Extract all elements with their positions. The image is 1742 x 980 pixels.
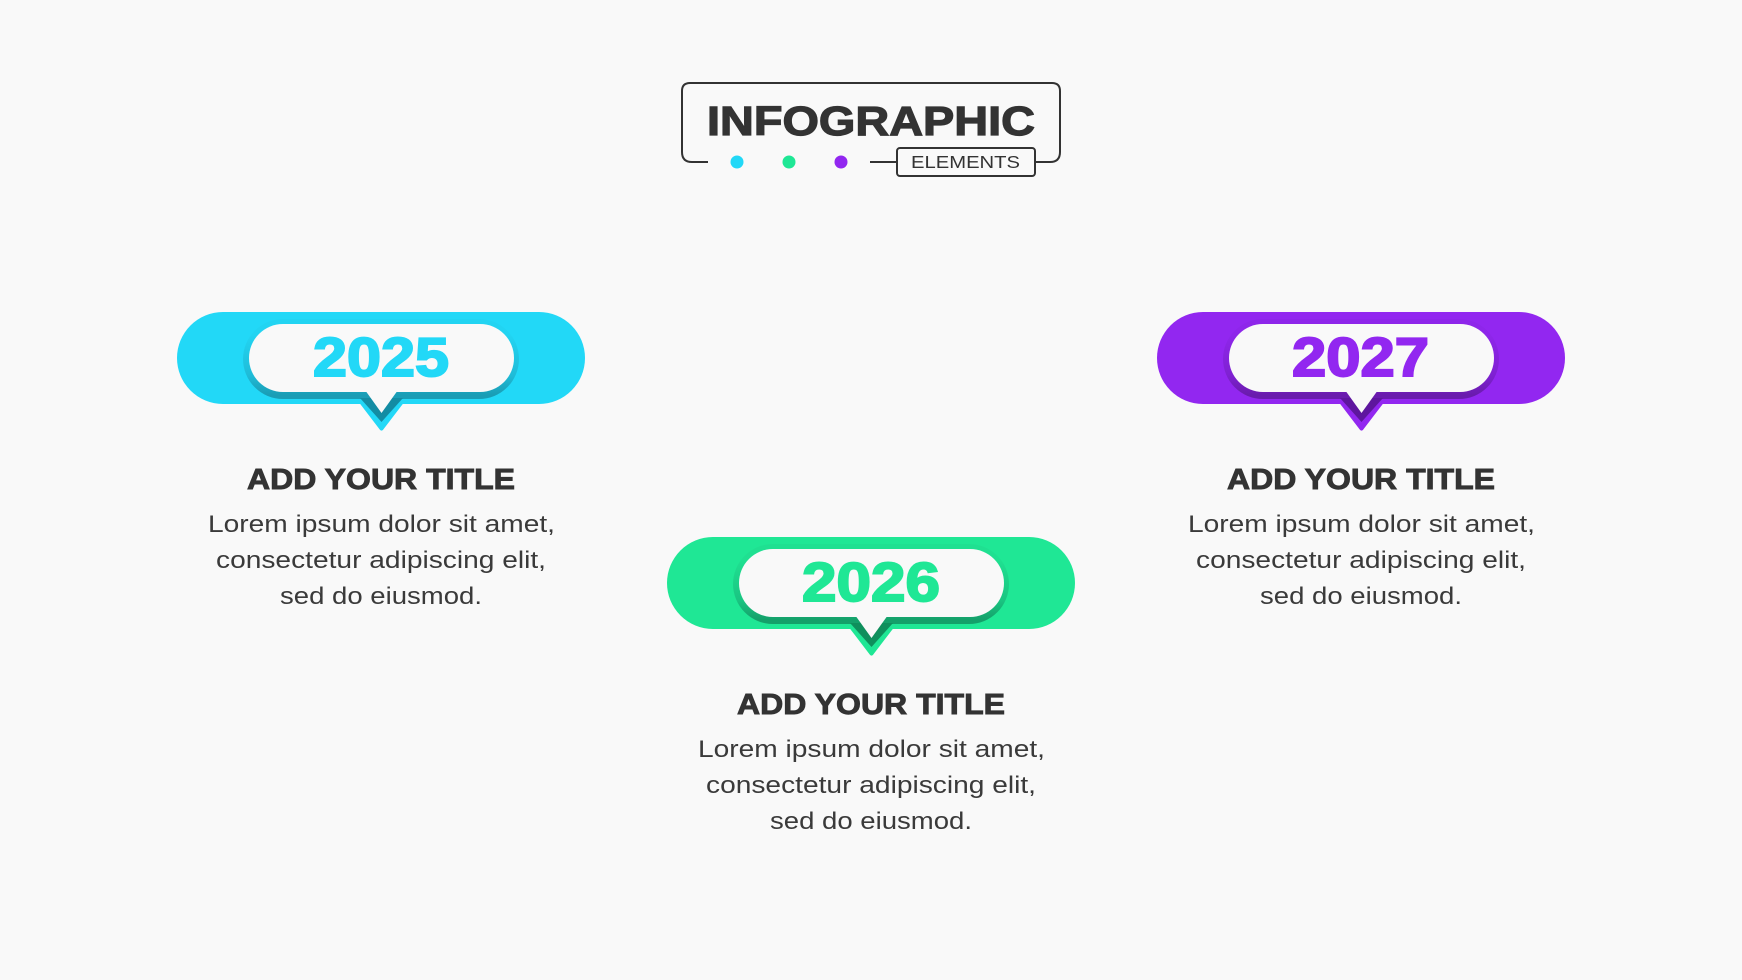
year badge 2026: 2026 xyxy=(802,551,940,613)
year badge 2025 xyxy=(177,312,585,428)
body text xyxy=(698,736,1045,835)
year badge 2025: 2025 xyxy=(313,326,449,388)
heading: ADD YOUR TITLE xyxy=(1227,464,1495,496)
body text: Lorem ipsum dolor sit amet, xyxy=(208,511,555,538)
year badge 2026 xyxy=(667,537,1075,654)
body text: consectetur adipiscing elit, xyxy=(706,772,1036,799)
header badge xyxy=(682,83,1060,176)
panel: 2027 xyxy=(1157,312,1565,610)
body text: consectetur adipiscing elit, xyxy=(216,547,546,574)
colored dots xyxy=(730,156,848,168)
panel: 2026 xyxy=(667,537,1075,835)
body text: Lorem ipsum dolor sit amet, xyxy=(1188,511,1535,538)
body text: Lorem ipsum dolor sit amet, xyxy=(698,736,1045,763)
body text xyxy=(1188,511,1535,610)
heading: ADD YOUR TITLE xyxy=(247,464,515,496)
body text xyxy=(208,511,555,610)
panel: 2025 xyxy=(177,312,585,610)
heading: ADD YOUR TITLE xyxy=(737,689,1005,721)
title: INFOGRAPHIC: INFOGRAPHIC xyxy=(707,98,1035,144)
body text: sed do eiusmod. xyxy=(770,808,972,835)
year badge 2027 xyxy=(1157,312,1565,428)
year badge 2027: 2027 xyxy=(1292,326,1429,388)
elements label box: ELEMENTS xyxy=(911,152,1020,172)
body text: sed do eiusmod. xyxy=(280,583,482,610)
body text: sed do eiusmod. xyxy=(1260,583,1462,610)
elements label box xyxy=(897,148,1035,176)
body text: consectetur adipiscing elit, xyxy=(1196,547,1526,574)
header frame xyxy=(682,83,1060,162)
